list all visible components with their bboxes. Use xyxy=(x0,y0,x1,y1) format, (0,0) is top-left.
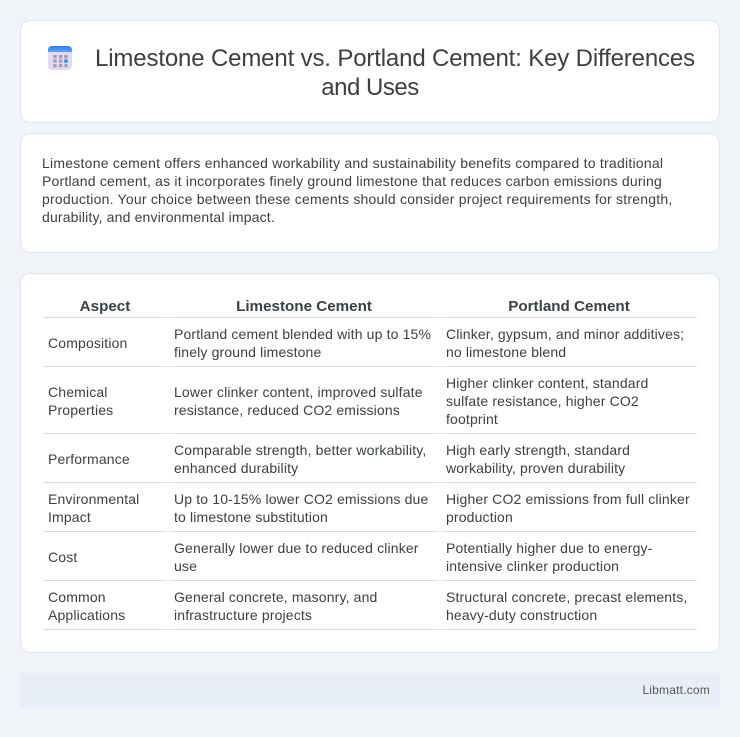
column heading: limestone cement: Limestone Cement xyxy=(236,298,372,315)
title xyxy=(95,45,695,101)
row: cost: Potentially higher due to energy- xyxy=(446,540,653,556)
column heading: aspect: Aspect xyxy=(80,298,130,315)
row: environmental impact: Environmental xyxy=(48,491,139,507)
icon: calendar xyxy=(48,46,72,70)
row: environmental impact: Higher CO2 emissions from full clinker xyxy=(446,491,690,507)
row: common applications: infrastructure projects xyxy=(174,607,312,623)
row: performance: Comparable strength, better workability, xyxy=(174,442,426,458)
row: cost: intensive clinker production xyxy=(446,558,619,574)
intro text xyxy=(42,155,672,225)
row: environmental impact xyxy=(43,491,697,532)
row: chemical properties xyxy=(43,375,697,434)
row: cost xyxy=(43,540,697,581)
row: cost: Generally lower due to reduced clinker xyxy=(174,540,419,556)
footer text: Libmatt.com xyxy=(642,683,710,697)
row: performance: Performance xyxy=(48,451,130,467)
intro text: durability, and environmental impact. xyxy=(42,209,275,225)
comparison table xyxy=(43,298,697,630)
row: cost: Cost xyxy=(48,549,77,565)
row: chemical properties: Properties xyxy=(48,402,113,418)
intro card xyxy=(20,133,720,253)
row: composition: Portland cement blended with up to 15% xyxy=(174,326,431,342)
row: environmental impact: Up to 10-15% lower CO2 emissions due xyxy=(174,491,428,507)
row: composition xyxy=(43,326,697,367)
row: common applications: General concrete, masonry, and xyxy=(174,589,377,605)
footer bar xyxy=(20,673,720,707)
intro text: Portland cement, as it incorporates finely ground limestone that reduces carbon emissions during xyxy=(42,173,662,189)
table card xyxy=(20,273,720,653)
row: chemical properties: Lower clinker content, improved sulfate xyxy=(174,384,423,400)
row: composition: Composition xyxy=(48,335,127,351)
row: performance: enhanced durability xyxy=(174,460,298,476)
header card xyxy=(20,20,720,123)
row: performance: High early strength, standard xyxy=(446,442,630,458)
row: composition: Clinker, gypsum, and minor additives; xyxy=(446,326,684,342)
row: environmental impact: production xyxy=(446,509,513,525)
row: chemical properties: footprint xyxy=(446,411,498,427)
intro text: Limestone cement offers enhanced workability and sustainability benefits compared to traditional xyxy=(42,155,663,171)
row: cost: use xyxy=(174,558,197,574)
row: performance xyxy=(43,442,697,483)
row: chemical properties: Higher clinker content, standard xyxy=(446,375,648,391)
row: common applications: Structural concrete, precast elements, xyxy=(446,589,687,605)
row: chemical properties: resistance, reduced CO2 emissions xyxy=(174,402,400,418)
table header row xyxy=(43,298,697,318)
row: composition: no limestone blend xyxy=(446,344,566,360)
row: chemical properties: sulfate resistance, higher CO2 xyxy=(446,393,639,409)
row: common applications: heavy-duty construction xyxy=(446,607,597,623)
title: Limestone Cement vs. Portland Cement: Key Differences xyxy=(95,45,695,72)
row: common applications xyxy=(43,589,697,630)
row: composition: finely ground limestone xyxy=(174,344,321,360)
row: chemical properties: Chemical xyxy=(48,384,108,400)
intro text: production. Your choice between these cements should consider project requirements for strength, xyxy=(42,191,672,207)
row: performance: workability, proven durability xyxy=(446,460,625,476)
row: environmental impact: Impact xyxy=(48,509,91,525)
title: and Uses xyxy=(321,74,419,101)
row: common applications: Common xyxy=(48,589,106,605)
row: environmental impact: to limestone substitution xyxy=(174,509,328,525)
row: common applications: Applications xyxy=(48,607,125,623)
column heading: portland cement: Portland Cement xyxy=(508,298,630,315)
